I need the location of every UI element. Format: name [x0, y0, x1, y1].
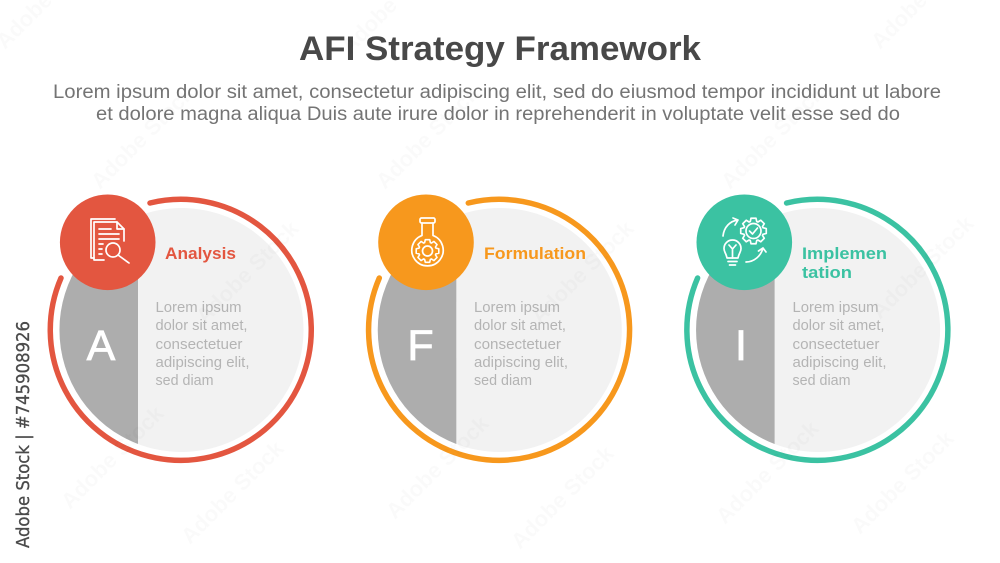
body text: consectetuer [792, 336, 880, 353]
faint watermark pattern: Adobe Stock [526, 215, 639, 329]
inner light circle [60, 208, 304, 452]
faint watermark pattern: Adobe Stock [86, 80, 199, 194]
subtitle text: Lorem ipsum dolor sit amet, consectetur adipiscing elit, sed do eiusmod tempor incididunt ut labore [53, 82, 941, 103]
body text: adipiscing elit, [156, 354, 250, 371]
inner light circle [378, 208, 622, 452]
icon badge circle [696, 194, 792, 290]
icon: flask with gear [412, 218, 443, 266]
faint watermark pattern: Adobe Stock [866, 210, 979, 324]
inner light circle [696, 208, 940, 452]
icon: document with magnifier [91, 219, 129, 263]
letter I: I [735, 322, 747, 370]
faint watermark pattern: Adobe Stock [191, 215, 304, 329]
faint watermark pattern: Adobe Stock [846, 425, 959, 539]
faint watermark pattern: Adobe Stock [371, 80, 484, 194]
heading: Implementation: tation [802, 264, 852, 282]
faint watermark pattern: Adobe Stock [176, 435, 289, 549]
body text: Lorem ipsum [792, 299, 878, 316]
subtitle text [53, 82, 941, 125]
body text: sed diam [474, 372, 532, 389]
heading: Analysis: Analysis [165, 245, 236, 263]
icon badge circle [60, 194, 156, 290]
body text: sed diam [792, 372, 850, 389]
watermark credit: Adobe Stock | #745908926 [13, 321, 34, 548]
body text: Lorem ipsum [474, 299, 560, 316]
faint watermark pattern: Adobe Stock [56, 400, 169, 514]
subtitle text: et dolore magna aliqua Duis aute irure dolor in reprehenderit in voluptate velit esse sed do [96, 104, 900, 125]
heading: Implementation [802, 245, 887, 282]
body text: dolor sit amet, [156, 317, 248, 334]
panel: analysis [50, 194, 311, 460]
body text: consectetuer [474, 336, 561, 353]
letter F: F [407, 322, 434, 370]
outer ring arc [50, 199, 311, 460]
outer ring arc [369, 199, 630, 460]
body text: Lorem ipsum [156, 299, 242, 316]
outer ring arc [687, 199, 948, 460]
body text: dolor sit amet, [792, 317, 884, 334]
faint watermark pattern: Adobe Stock [711, 415, 824, 529]
letter A: A [87, 322, 116, 370]
faint watermark pattern: Adobe Stock [506, 440, 619, 554]
body text: adipiscing elit, [792, 354, 886, 371]
heading: Implementation: Implemen [802, 245, 887, 263]
body text [474, 299, 568, 389]
grey letter segment [59, 216, 138, 444]
body text [792, 299, 886, 389]
heading: Formulation: Formulation [484, 245, 586, 263]
faint watermark pattern: Adobe Stock [381, 410, 494, 524]
panel: implementation [687, 194, 948, 460]
body text [156, 299, 250, 389]
icon badge circle [378, 194, 474, 290]
body text: sed diam [156, 372, 214, 389]
grey letter segment [378, 216, 456, 444]
panel: formulation [369, 194, 630, 460]
icon: gear, bulb and arrows [723, 218, 766, 265]
body text: consectetuer [156, 336, 242, 353]
body text: adipiscing elit, [474, 354, 568, 371]
grey letter segment [696, 216, 775, 444]
body text: dolor sit amet, [474, 317, 566, 334]
title: AFI Strategy Framework [299, 30, 701, 68]
faint watermark pattern: Adobe Stock [716, 80, 829, 194]
